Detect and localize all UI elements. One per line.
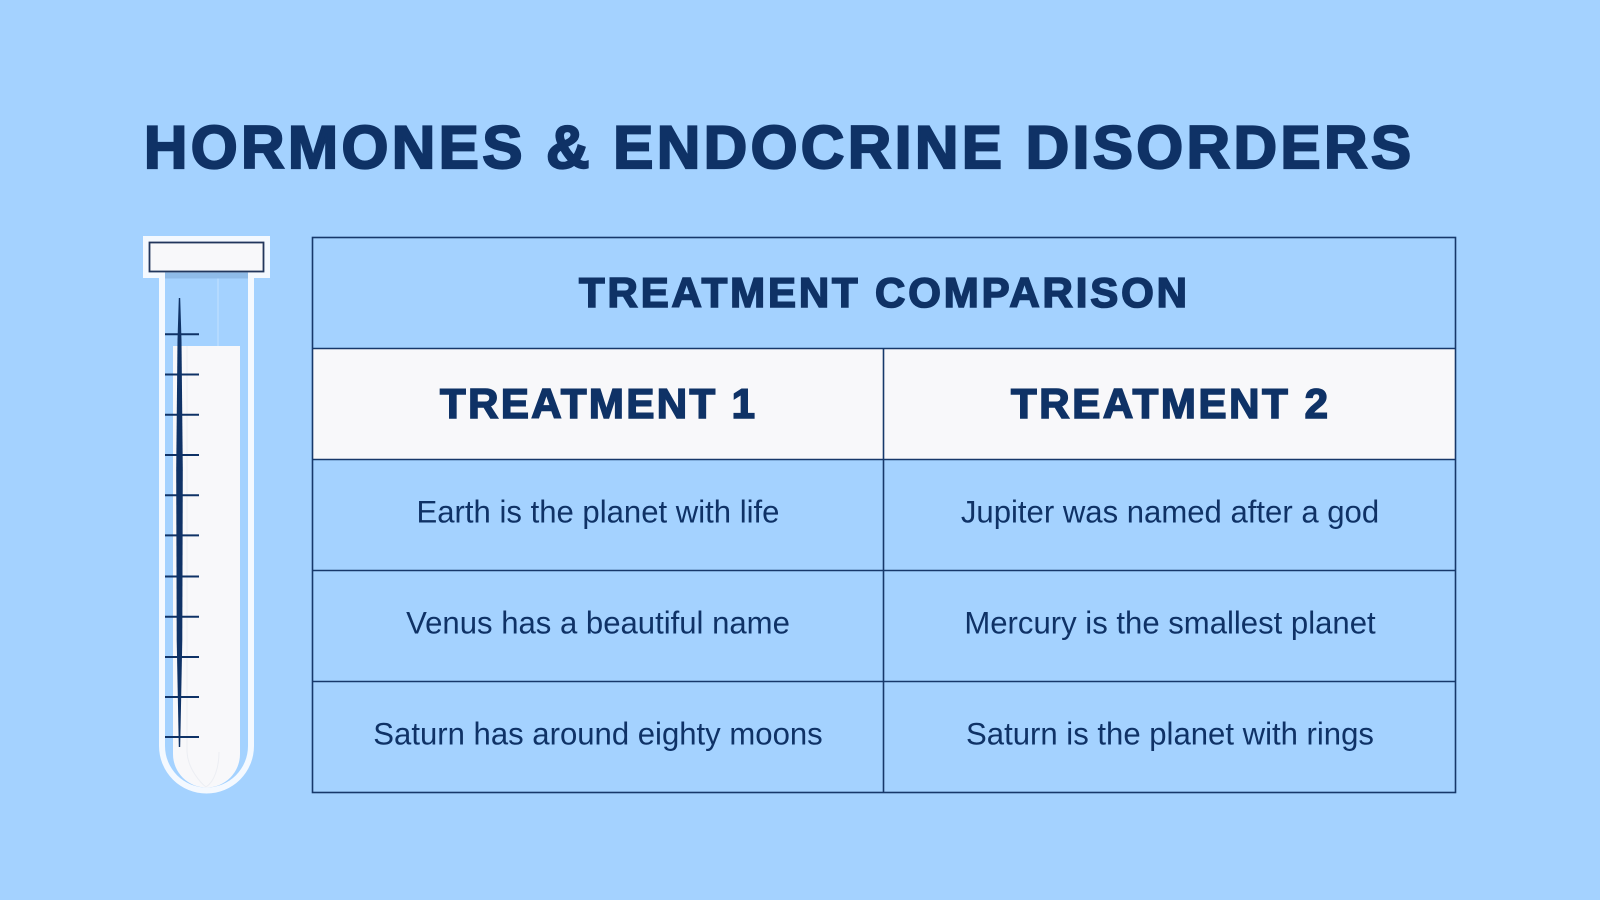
column heading: treatment 1: TREATMENT 1 <box>440 380 755 427</box>
table grid <box>312 238 1456 792</box>
liquid <box>173 346 240 787</box>
tube glass wall <box>159 270 254 794</box>
header row background <box>312 348 1456 459</box>
row 1 left: Earth is the planet with life <box>417 494 779 530</box>
title: HORMONES & ENDOCRINE DISORDERS <box>144 114 1411 181</box>
icon: test tube <box>143 236 270 794</box>
row 1 right: Jupiter was named after a god <box>961 494 1379 530</box>
row 3 left: Saturn has around eighty moons <box>373 716 823 752</box>
measurement needle <box>176 298 183 747</box>
tube interior <box>165 270 248 787</box>
cap <box>143 236 270 278</box>
row 3 right: Saturn is the planet with rings <box>966 716 1374 752</box>
table: treatment comparison <box>312 238 1456 792</box>
table heading: TREATMENT COMPARISON <box>579 269 1187 316</box>
column heading: treatment 2: TREATMENT 2 <box>1011 380 1328 427</box>
measurement ticks <box>165 334 199 737</box>
tube highlight line <box>217 278 219 346</box>
liquid inner curve <box>187 346 219 787</box>
row 2 left: Venus has a beautiful name <box>406 606 790 640</box>
shadow below the cap <box>165 272 248 278</box>
row 2 right: Mercury is the smallest planet <box>964 606 1376 640</box>
